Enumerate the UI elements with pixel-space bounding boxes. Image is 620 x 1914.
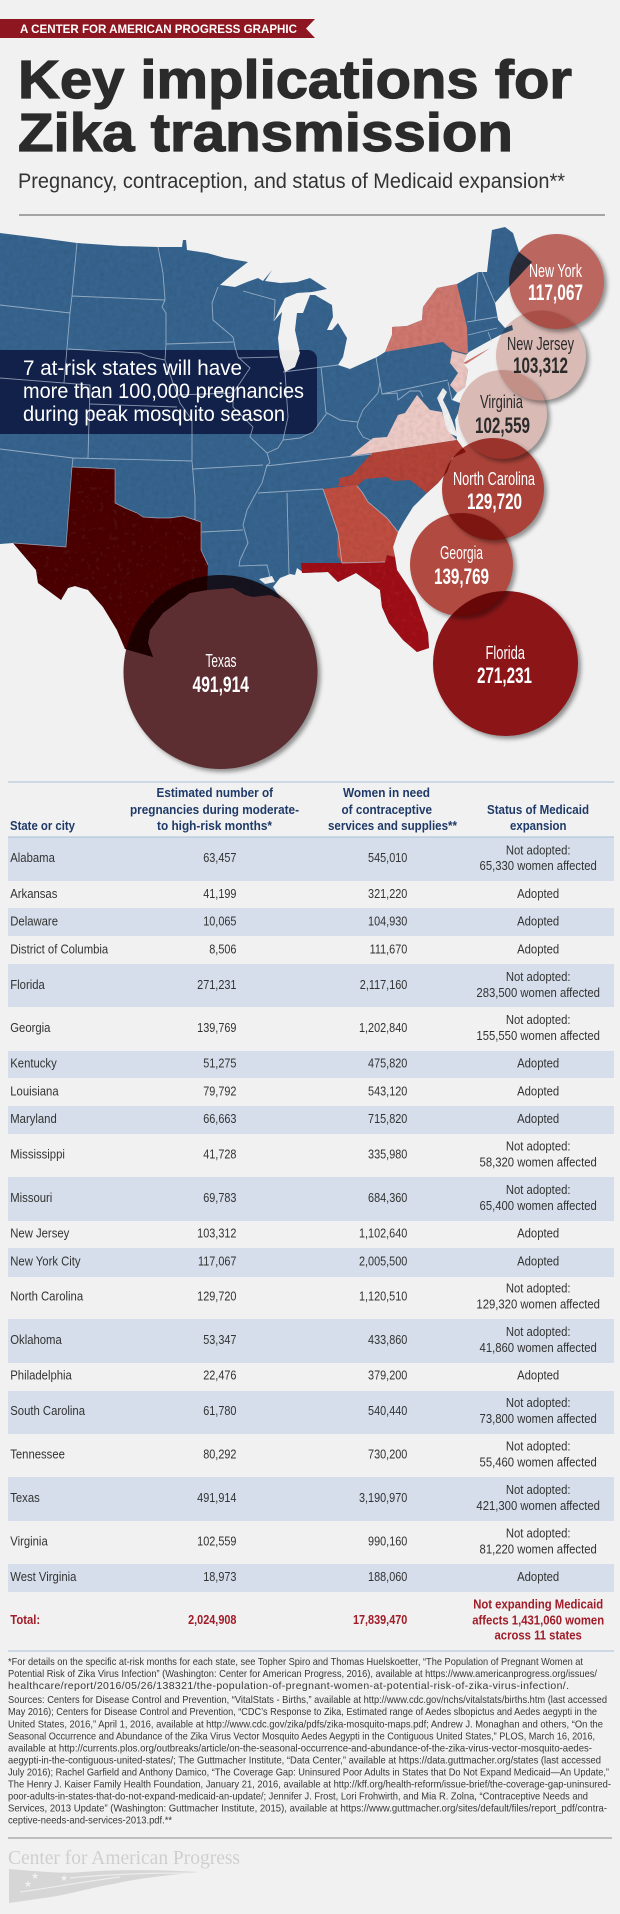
row: Total: affects 1,431,060 women xyxy=(472,1613,604,1628)
bubble: Florida xyxy=(433,591,578,736)
row: Louisiana xyxy=(10,1084,559,1099)
row: New York City: 117,067 xyxy=(198,1255,236,1269)
row: Virginia: Virginia xyxy=(10,1534,48,1549)
subtitle: Pregnancy, contraception, and status of Medicaid expansion** xyxy=(18,170,565,193)
bubble: New Jersey: 103,312 xyxy=(513,353,568,378)
row: Oklahoma: 433,860 xyxy=(368,1333,408,1347)
footnote: healthcare/report/2016/05/26/138321/the-population-of-pregnant-women-at-potential-risk-of-zika-virus-infection/. xyxy=(8,1680,569,1692)
row: Delaware: 104,930 xyxy=(368,915,408,929)
state: North Carolina xyxy=(338,440,466,493)
Chesapeake Bay and Gulf bay xyxy=(437,388,458,437)
row: New Jersey: New Jersey xyxy=(10,1226,70,1241)
row: District of Columbia: 8,506 xyxy=(209,943,236,957)
row: South Carolina: 61,780 xyxy=(203,1404,237,1418)
row: New Jersey: Adopted xyxy=(517,1226,559,1241)
row: Maryland: Maryland xyxy=(10,1111,57,1126)
row: Philadelphia: Adopted xyxy=(517,1368,559,1383)
callout text: more than 100,000 pregnancies xyxy=(23,380,304,403)
row: Arkansas: Arkansas xyxy=(10,886,57,901)
row: Maryland: 66,663 xyxy=(203,1112,236,1126)
row: Georgia: Not adopted: xyxy=(506,1012,571,1027)
row: Total: Total: xyxy=(10,1612,40,1627)
row: Louisiana: 79,792 xyxy=(203,1085,236,1099)
table rows xyxy=(10,843,604,1643)
row: Missouri: 684,360 xyxy=(368,1191,408,1205)
row: Texas: Texas xyxy=(10,1490,40,1505)
callout text xyxy=(23,357,304,426)
row: Missouri: Missouri xyxy=(10,1190,52,1205)
row: Texas: Not adopted: xyxy=(506,1482,571,1497)
sources: ceptive-needs-and-services-2013.pdf.** xyxy=(8,1814,172,1826)
row: Georgia xyxy=(10,1012,600,1043)
row: Philadelphia: Philadelphia xyxy=(10,1368,72,1383)
row: Total xyxy=(10,1597,604,1643)
row: Total: across 11 states xyxy=(495,1628,582,1643)
row: Tennessee: Not adopted: xyxy=(506,1439,571,1454)
row: District of Columbia: Adopted xyxy=(517,942,559,957)
bubble: Virginia: Virginia xyxy=(480,392,524,412)
icon: flag swoosh: ★ xyxy=(31,1871,39,1881)
title: Zika transmission xyxy=(18,103,513,163)
state: Texas xyxy=(13,467,208,657)
row: Arkansas xyxy=(10,886,559,901)
bubble: Florida: 271,231 xyxy=(477,663,532,688)
data table xyxy=(8,782,614,1651)
row: Alabama: 65,330 women affected xyxy=(480,858,597,873)
row: Tennessee: Tennessee xyxy=(10,1447,65,1462)
row: Kentucky: Kentucky xyxy=(10,1056,58,1071)
row: South Carolina xyxy=(10,1395,597,1426)
row: North Carolina xyxy=(10,1281,600,1312)
row: South Carolina: 540,440 xyxy=(368,1404,408,1418)
callout band xyxy=(0,350,317,434)
bubble: New York: New York xyxy=(529,261,583,281)
logo: Center for American Progress xyxy=(8,1847,240,1903)
bubble: Texas: Texas xyxy=(206,651,236,671)
row: Maryland: Adopted xyxy=(517,1111,559,1126)
row: Texas xyxy=(10,1482,600,1513)
row: New York City xyxy=(10,1254,559,1269)
bubble: Texas: 491,914 xyxy=(192,672,250,697)
row: New York City: New York City xyxy=(10,1254,81,1269)
bubble: New York xyxy=(509,234,604,329)
row: Oklahoma: 53,347 xyxy=(203,1333,236,1347)
row: South Carolina: South Carolina xyxy=(10,1403,85,1418)
row: Virginia: 81,220 women affected xyxy=(480,1542,597,1557)
row: Missouri: 65,400 women affected xyxy=(480,1198,597,1213)
row: Louisiana: Adopted xyxy=(517,1084,559,1099)
row: West Virginia: West Virginia xyxy=(10,1569,77,1584)
row: Georgia: Georgia xyxy=(10,1020,51,1035)
row: Maryland: 715,820 xyxy=(368,1112,408,1126)
bubble: North Carolina: North Carolina xyxy=(453,469,536,489)
footnote xyxy=(8,1656,597,1692)
row: Mississippi: Not adopted: xyxy=(506,1139,571,1154)
row: Oklahoma xyxy=(10,1324,597,1355)
bubble: New York: 117,067 xyxy=(528,280,583,305)
row: Florida: 271,231 xyxy=(197,978,236,992)
bubble: Virginia: 102,559 xyxy=(475,413,530,438)
row: Alabama: 63,457 xyxy=(203,851,236,865)
row: West Virginia: 188,060 xyxy=(368,1570,408,1584)
row: Total: 2,024,908 xyxy=(188,1613,237,1627)
row: Florida: 283,500 women affected xyxy=(476,985,600,1000)
row: District of Columbia: District of Columbia xyxy=(10,942,108,957)
row: Arkansas: Adopted xyxy=(517,886,559,901)
row: Florida: 2,117,160 xyxy=(360,978,408,992)
table header: Estimated number of xyxy=(156,785,274,800)
state: Florida xyxy=(301,555,429,652)
bubble: Georgia xyxy=(410,513,513,616)
row: Louisiana: Louisiana xyxy=(10,1084,59,1099)
row: Georgia: 139,769 xyxy=(197,1021,236,1035)
row: West Virginia: Adopted xyxy=(517,1569,559,1584)
row: West Virginia: 18,973 xyxy=(203,1570,236,1584)
row: New York City: 2,005,500 xyxy=(359,1255,408,1269)
row: New York City: Adopted xyxy=(517,1254,559,1269)
row: Florida xyxy=(10,969,600,1000)
row: North Carolina: Not adopted: xyxy=(506,1281,571,1296)
logo: Center for American Progress: Center for American Progress xyxy=(8,1847,240,1869)
row: Mississippi xyxy=(10,1139,597,1170)
row: Texas: 3,190,970 xyxy=(359,1491,408,1505)
callout text: during peak mosquito season xyxy=(23,403,285,426)
row: North Carolina: 129,720 xyxy=(197,1290,237,1304)
row: Missouri xyxy=(10,1182,597,1213)
sources xyxy=(8,1694,611,1826)
row: Tennessee xyxy=(10,1439,597,1470)
row: Total: 17,839,470 xyxy=(353,1613,408,1627)
header ribbon: A CENTER FOR AMERICAN PROGRESS GRAPHIC xyxy=(20,22,297,36)
icon: flag swoosh: ★ xyxy=(24,1879,32,1889)
table header: to high-risk months* xyxy=(157,818,273,833)
table header: pregnancies during moderate- xyxy=(130,802,299,817)
row: Kentucky: 475,820 xyxy=(368,1057,408,1071)
table header xyxy=(10,785,589,833)
row: Alabama: 545,010 xyxy=(368,851,408,865)
Lake Michigan over band xyxy=(279,350,300,372)
row: South Carolina: 73,800 women affected xyxy=(480,1411,597,1426)
row: Oklahoma: 41,860 women affected xyxy=(480,1340,597,1355)
table header: Status of Medicaid xyxy=(487,802,589,817)
row: Delaware: Delaware xyxy=(10,914,58,929)
row: Virginia: Not adopted: xyxy=(506,1526,571,1541)
state: New Jersey xyxy=(450,351,468,393)
row: New Jersey: 1,102,640 xyxy=(359,1227,408,1241)
row: South Carolina: Not adopted: xyxy=(506,1395,571,1410)
row: Arkansas: 41,199 xyxy=(203,887,236,901)
row: Alabama xyxy=(10,843,597,873)
row: Virginia xyxy=(10,1526,597,1557)
row: Delaware: Adopted xyxy=(517,914,559,929)
row: District of Columbia: 111,670 xyxy=(370,943,408,957)
bubble: Georgia: 139,769 xyxy=(434,564,489,589)
row: Georgia: 1,202,840 xyxy=(359,1021,408,1035)
bubble: Florida: Florida xyxy=(486,643,526,663)
row: New Jersey xyxy=(10,1226,559,1241)
row: Delaware xyxy=(10,914,559,929)
bubble: New Jersey: New Jersey xyxy=(507,334,574,354)
row: Tennessee: 55,460 women affected xyxy=(480,1455,597,1470)
row: Texas: 491,914 xyxy=(197,1491,237,1505)
row: Virginia: 990,160 xyxy=(368,1535,408,1549)
map of the United States xyxy=(0,227,532,657)
row: Oklahoma: Not adopted: xyxy=(506,1324,571,1339)
state: Virginia xyxy=(350,395,457,456)
row: Missouri: 69,783 xyxy=(203,1191,236,1205)
states not at risk xyxy=(0,227,532,657)
row: District of Columbia xyxy=(10,942,559,957)
row: Tennessee: 730,200 xyxy=(368,1448,408,1462)
bubble: New Jersey xyxy=(496,310,586,400)
row: Florida: Florida xyxy=(10,977,45,992)
row: Philadelphia: 379,200 xyxy=(368,1369,408,1383)
row: Maryland xyxy=(10,1111,559,1126)
table header: State or city xyxy=(10,818,76,833)
row: Delaware: 10,065 xyxy=(203,915,237,929)
row: Alabama: Alabama xyxy=(10,850,55,865)
row: Missouri: Not adopted: xyxy=(506,1182,571,1197)
row shading xyxy=(8,838,614,1592)
bubble: Texas xyxy=(124,575,318,769)
callout text: 7 at-risk states will have xyxy=(23,357,242,380)
table header: services and supplies** xyxy=(328,818,458,833)
row: North Carolina: North Carolina xyxy=(10,1289,83,1304)
table header: Women in need xyxy=(343,785,430,800)
row: Virginia: 102,559 xyxy=(197,1535,236,1549)
row: Philadelphia: 22,476 xyxy=(203,1369,236,1383)
bubble: North Carolina: 129,720 xyxy=(467,489,522,514)
row: Arkansas: 321,220 xyxy=(368,887,408,901)
row: Kentucky xyxy=(10,1056,559,1071)
row: North Carolina: 1,120,510 xyxy=(359,1290,408,1304)
row: Texas: 421,300 women affected xyxy=(476,1498,600,1513)
row: Georgia: 155,550 women affected xyxy=(476,1028,600,1043)
icon: flag swoosh xyxy=(9,1869,198,1903)
state: New York xyxy=(385,284,468,354)
row: Kentucky: Adopted xyxy=(517,1056,559,1071)
bubble: Georgia: Georgia xyxy=(440,543,484,563)
header ribbon xyxy=(0,19,315,38)
table header: expansion xyxy=(510,818,567,833)
row: Louisiana: 543,120 xyxy=(368,1085,408,1099)
row: Mississippi: 335,980 xyxy=(368,1148,408,1162)
bubble: Virginia xyxy=(458,370,547,459)
row: Mississippi: 58,320 women affected xyxy=(480,1155,597,1170)
state: Georgia xyxy=(323,485,398,563)
title: Key implications for xyxy=(18,50,572,110)
bubble: North Carolina xyxy=(442,438,544,540)
row: Alabama: Not adopted: xyxy=(506,843,571,858)
row: North Carolina: 129,320 women affected xyxy=(476,1297,600,1312)
row: Oklahoma: Oklahoma xyxy=(10,1332,62,1347)
row: Mississippi: 41,728 xyxy=(203,1148,236,1162)
icon: flag swoosh: ★ xyxy=(60,1873,68,1883)
row: Florida: Not adopted: xyxy=(506,969,571,984)
row: Kentucky: 51,275 xyxy=(203,1057,237,1071)
title xyxy=(18,50,572,163)
row: Total: Not expanding Medicaid xyxy=(473,1597,603,1612)
row: West Virginia xyxy=(10,1569,559,1584)
table header: of contraceptive xyxy=(342,802,432,817)
state borders xyxy=(0,243,497,577)
row: New Jersey: 103,312 xyxy=(197,1227,236,1241)
row: Tennessee: 80,292 xyxy=(203,1448,236,1462)
row: Philadelphia xyxy=(10,1368,559,1383)
row: Mississippi: Mississippi xyxy=(10,1147,65,1162)
